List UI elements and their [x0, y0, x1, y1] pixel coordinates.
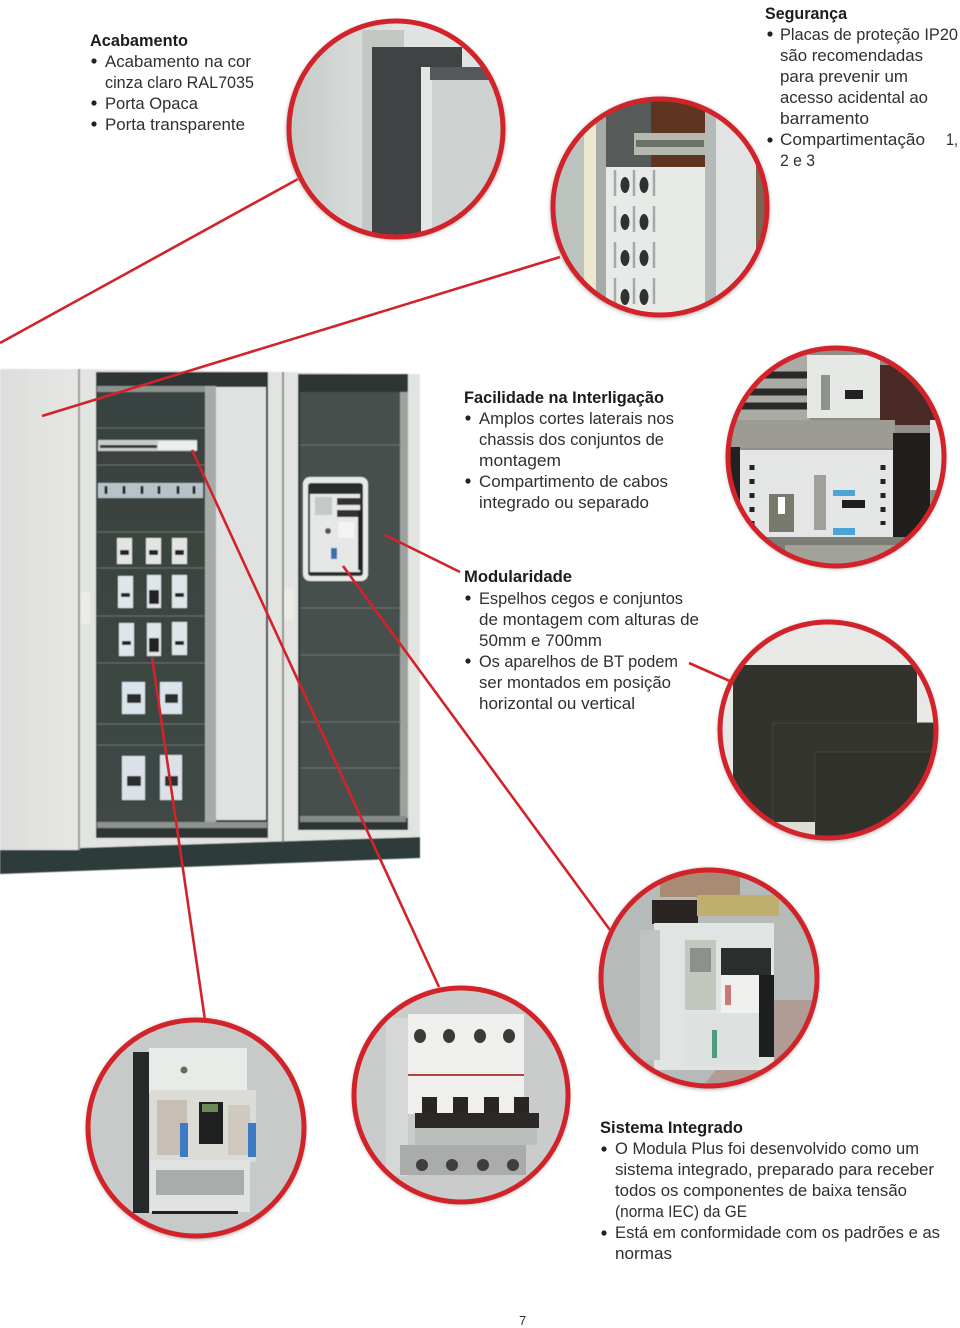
circle: door finishes: [285, 18, 512, 250]
circle: busbar protection plates: [550, 96, 770, 318]
text block: Sistema Integrado: [600, 1118, 940, 1263]
circle: moulded case breaker: [85, 1017, 307, 1239]
modules row 4: [122, 682, 182, 714]
heading: Facilidade na Interligação: Facilidade na Interligação: [464, 388, 664, 407]
bullet list: Sistema Integrado: sistema integrado, preparado para receber: [615, 1160, 934, 1179]
bullet list: Modularidade: ser montados em posição: [479, 673, 671, 692]
heading: Acabamento: Acabamento: [90, 31, 188, 50]
bullet list: Segurança: barramento: [780, 109, 869, 128]
bullet list: Acabamento: Porta Opaca: [105, 94, 199, 113]
bullet list: Acabamento: Acabamento na cor: [105, 52, 251, 71]
bullet list: Segurança: acesso acidental ao: [780, 88, 928, 107]
bullet list: Modularidade: Os aparelhos de BT podem: [479, 652, 678, 671]
bullet list: Sistema Integrado: O Modula Plus foi desenvolvido como um: [615, 1139, 919, 1158]
heading: Modularidade: Modularidade: [464, 567, 572, 586]
handles: [81, 592, 90, 624]
bullet list: Sistema Integrado: normas: [615, 1244, 672, 1263]
circle: air circuit breaker: [598, 867, 820, 1089]
heading: Sistema Integrado: Sistema Integrado: [600, 1118, 743, 1137]
bullet list: Modularidade: [465, 589, 699, 713]
bullet list: Segurança: Placas de proteção IP20: [780, 25, 958, 44]
bullet list: Segurança: [767, 25, 958, 170]
bullet list: Segurança: para prevenir um: [780, 67, 908, 86]
bullet list: Segurança: Compartimentação: [780, 130, 925, 149]
bullet list: Modularidade: Espelhos cegos e conjuntos: [479, 589, 683, 608]
air circuit breaker: [303, 477, 368, 581]
modules row 3: [119, 622, 187, 656]
bullet list: Facilidade na Interligação: chassis dos conjuntos de: [479, 430, 664, 449]
bullet list: Segurança: são recomendadas: [780, 46, 923, 65]
bullet list: Facilidade na Interligação: [465, 409, 674, 512]
bullet list: Acabamento: [91, 52, 254, 134]
text block: Segurança: [765, 4, 958, 170]
bullet list: Facilidade na Interligação: Compartimento de cabos: [479, 472, 668, 491]
bullet list: Facilidade na Interligação: Amplos cortes laterais nos: [479, 409, 674, 428]
bullet list: Sistema Integrado: [601, 1139, 940, 1263]
breaker strip: [98, 440, 197, 451]
bullet list: Segurança: 2 e 3: [780, 151, 815, 170]
bullet list: Sistema Integrado: (norma IEC) da GE: [615, 1202, 747, 1221]
bullet list: Sistema Integrado: Está em conformidade com os padrões e as: [615, 1223, 940, 1242]
bullet list: Acabamento: cinza claro RAL7035: [105, 73, 254, 92]
leader lines: [0, 179, 732, 1020]
bullet list: Facilidade na Interligação: montagem: [479, 451, 561, 470]
modules row 5: [122, 755, 182, 800]
modules row 1: [117, 538, 187, 564]
cabinet photo: [0, 369, 420, 874]
heading: Segurança: Segurança: [765, 4, 848, 23]
panel divider lines: [97, 428, 401, 768]
modules row 2: [118, 575, 187, 608]
left door: [0, 369, 78, 850]
breaker strip two: [98, 483, 203, 498]
circle: four-pole breaker: [351, 985, 571, 1205]
page number: 7: [519, 1313, 526, 1328]
bullet list: Modularidade: de montagem com alturas de: [479, 610, 699, 629]
bullet list: Acabamento: Porta transparente: [105, 115, 245, 134]
text block: Modularidade: [464, 567, 699, 713]
cabinet frame: [80, 369, 420, 848]
bullet list: Modularidade: horizontal ou vertical: [479, 694, 635, 713]
text block: Acabamento: [90, 31, 254, 134]
bullet list: Sistema Integrado: todos os componentes de baixa tensão: [615, 1181, 907, 1200]
text block: Facilidade na Interligação: [464, 388, 674, 512]
bullet list: Facilidade na Interligação: integrado ou separado: [479, 493, 649, 512]
bullet list: Modularidade: 50mm e 700mm: [479, 631, 602, 650]
base plinth: [0, 837, 420, 874]
bullet list: Segurança: 1,: [946, 130, 958, 149]
circle: blind panels: [716, 620, 940, 842]
circle: interconnection: [725, 345, 948, 569]
